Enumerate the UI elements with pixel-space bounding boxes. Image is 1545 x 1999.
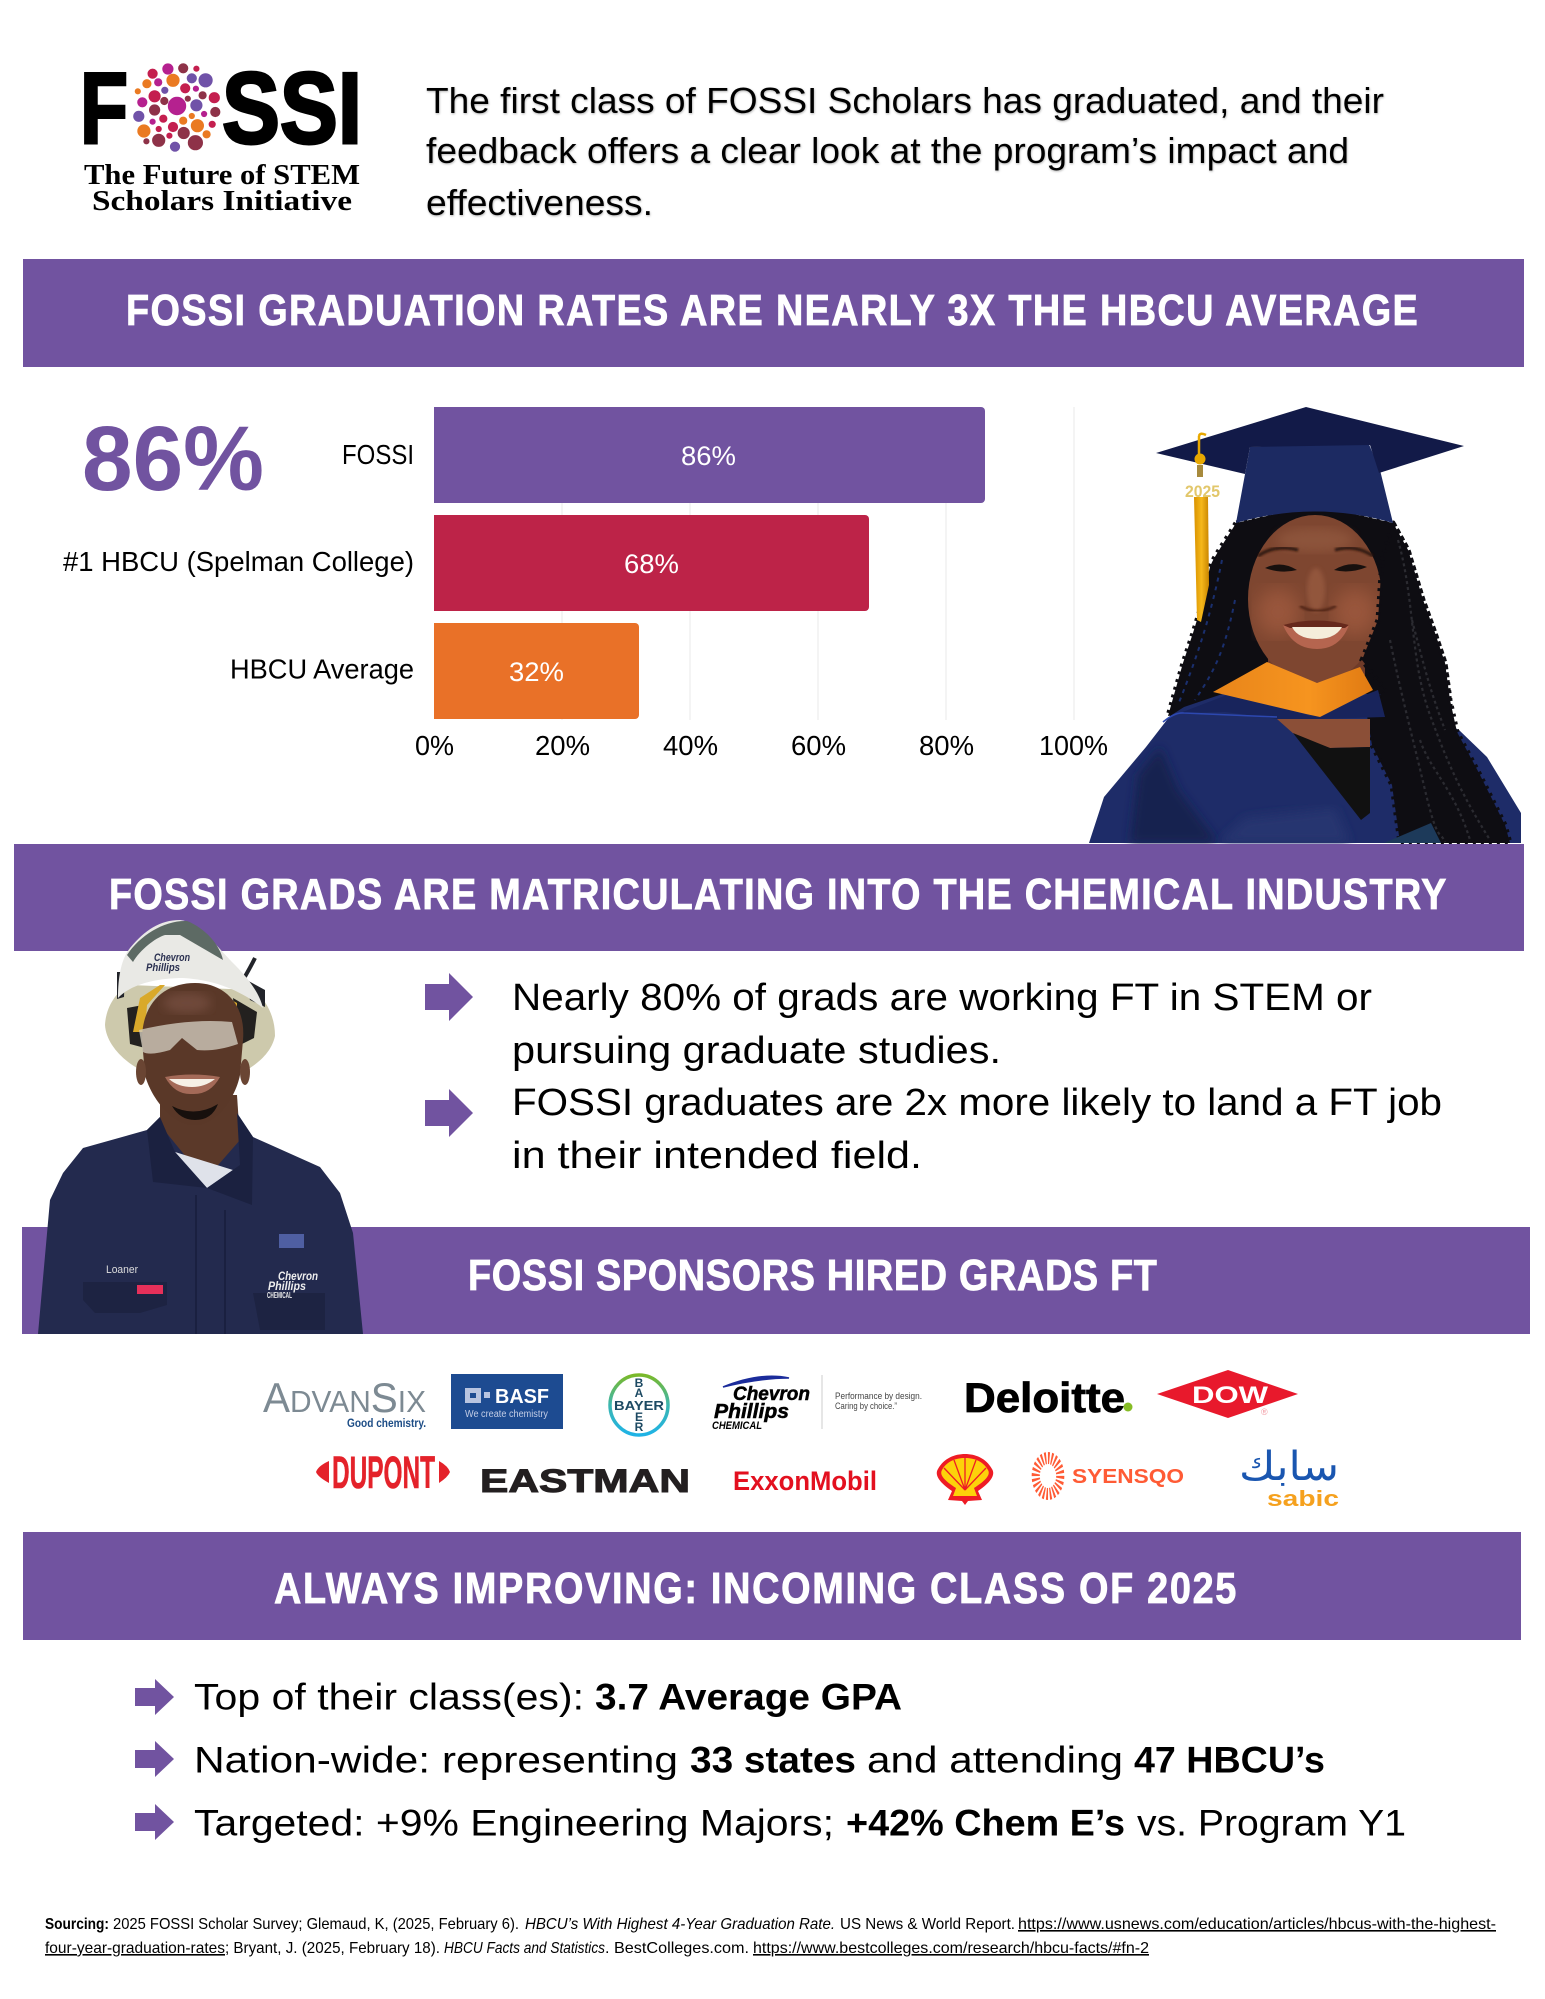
bar: FOSSI 86%: FOSSI bbox=[342, 439, 414, 470]
bar: #1 HBCU 68% bbox=[63, 515, 869, 611]
logo: Deloitte: Deloitte bbox=[964, 1374, 1125, 1421]
logo: FOSSI bbox=[80, 53, 362, 217]
banner: sponsors heading: FOSSI SPONSORS HIRED GRADS FT bbox=[468, 1250, 1157, 1300]
bullet: targeted bbox=[135, 1802, 1406, 1844]
bar: HBCU Average 32%: HBCU Average bbox=[230, 654, 414, 684]
banner: matriculating heading bbox=[14, 844, 1524, 951]
x axis labels: 100% bbox=[1039, 730, 1108, 761]
bullet: 2x more likely bbox=[425, 1082, 1442, 1177]
photo: engineer: Chevron bbox=[278, 1269, 318, 1283]
photo: engineer: CHEMICAL bbox=[267, 1291, 292, 1300]
pockets and badges bbox=[83, 1282, 167, 1313]
hair behind bbox=[1168, 505, 1450, 716]
cap crown bbox=[1236, 442, 1393, 523]
photo: engineer bbox=[38, 920, 363, 1334]
photo: engineer: Phillips bbox=[268, 1279, 306, 1293]
photo: engineer: Loaner bbox=[106, 1264, 138, 1276]
bullet: targeted: vs. Program Y1 bbox=[1137, 1802, 1406, 1844]
photo: graduate bbox=[1089, 407, 1521, 843]
logo: Bayer: E bbox=[635, 1410, 643, 1424]
bullet: nation-wide: and attending bbox=[867, 1740, 1123, 1780]
goggles bbox=[127, 921, 223, 962]
bullet: GPA bbox=[135, 1676, 902, 1718]
logo: Chevron Phillips: Performance by design. bbox=[835, 1391, 922, 1401]
logo: Dow: DOW bbox=[1192, 1382, 1268, 1409]
logo: Bayer: BAYER bbox=[614, 1398, 665, 1413]
sourcing footnote: https://www.usnews.com/education/articles/hbcus-with-the-highest- bbox=[1018, 1916, 1496, 1933]
bullet: nation-wide: 47 HBCU’s bbox=[1134, 1740, 1325, 1780]
banner: incoming class heading bbox=[23, 1532, 1521, 1640]
bar chart: graduation rates bbox=[63, 407, 1108, 761]
tassel bbox=[1185, 434, 1220, 622]
hat logo: Chevron bbox=[154, 952, 190, 964]
neck bbox=[1268, 650, 1365, 695]
logo: Chevron Phillips bbox=[712, 1375, 922, 1432]
x axis labels: 0% bbox=[415, 730, 454, 761]
logo: DuPont: DUPONT bbox=[332, 1447, 435, 1498]
logo dot cluster bbox=[134, 64, 220, 151]
bar: HBCU Average 32%: 32% bbox=[509, 657, 564, 687]
chest and shirt bbox=[1277, 719, 1370, 748]
bullet: targeted: +42% Chem E’s bbox=[846, 1802, 1125, 1844]
face bbox=[1248, 515, 1382, 683]
logo: Bayer: B bbox=[635, 1376, 644, 1390]
intro text: The first class of FOSSI Scholars has graduated, and their bbox=[426, 80, 1384, 121]
logo tagline bbox=[84, 159, 360, 217]
x axis labels: 40% bbox=[663, 730, 718, 761]
tassel: 2025 bbox=[1185, 482, 1220, 501]
sourcing footnote: HBCU Facts and Statistics bbox=[444, 1940, 605, 1957]
logo: Bayer: A bbox=[635, 1386, 644, 1400]
sourcing footnote: ; Bryant, J. (2025, February 18). bbox=[225, 1940, 440, 1957]
bullet: 2x more likely: FOSSI graduates are 2x more likely to land a FT job bbox=[512, 1082, 1442, 1124]
logo: BASF: BASF bbox=[495, 1386, 549, 1408]
logo: AdvanSix: Good chemistry. bbox=[347, 1416, 426, 1430]
logo tagline: Scholars Initiative bbox=[92, 185, 352, 217]
intro text: feedback offers a clear look at the program’s impact and bbox=[426, 130, 1349, 171]
bullet: targeted: Targeted: +9% Engineering Majors; bbox=[194, 1802, 834, 1844]
logo: Chevron Phillips: Chevron bbox=[733, 1384, 810, 1405]
bar: #1 HBCU 68%: #1 HBCU (Spelman College) bbox=[63, 546, 414, 577]
x axis labels: 80% bbox=[919, 730, 974, 761]
logo: AdvanSix: ADVANSIX bbox=[263, 1374, 426, 1421]
photo: engineer: Phillips bbox=[146, 962, 180, 974]
bullet: nation-wide: Nation-wide: representing bbox=[194, 1740, 678, 1780]
intro text bbox=[426, 80, 1384, 223]
placket bbox=[196, 1195, 225, 1334]
logo: Sabic bbox=[1239, 1444, 1339, 1511]
bullet: GPA: 3.7 Average GPA bbox=[595, 1676, 902, 1718]
sourcing footnote: US News & World Report. bbox=[840, 1916, 1015, 1933]
coverall bbox=[38, 1113, 363, 1334]
bullet: nation-wide bbox=[135, 1740, 1325, 1780]
logo: Dow: ® bbox=[1261, 1407, 1268, 1417]
sourcing footnote bbox=[45, 1916, 1496, 1957]
hair front right bbox=[1362, 523, 1510, 843]
bullet: 2x more likely: in their intended field. bbox=[512, 1135, 922, 1177]
logo wordmark bbox=[80, 53, 362, 165]
intro text: effectiveness. bbox=[426, 182, 653, 223]
logo tagline: The Future of STEM bbox=[84, 159, 360, 191]
logo: Chevron Phillips: Phillips bbox=[714, 1401, 789, 1423]
logo: BASF bbox=[451, 1374, 563, 1429]
banner: graduation rates heading: FOSSI GRADUATION RATES ARE NEARLY 3X THE HBCU AVERAGE bbox=[126, 285, 1418, 335]
logo: Bayer bbox=[610, 1375, 668, 1435]
bar: FOSSI 86%: 86% bbox=[681, 441, 736, 471]
x axis labels bbox=[415, 730, 1108, 761]
sourcing footnote: 2025 FOSSI Scholar Survey; Glemaud, K, (2025, February 6). bbox=[113, 1916, 519, 1933]
logo: ExxonMobil: ExxonMobil bbox=[733, 1466, 877, 1496]
hard hat brim bbox=[105, 985, 275, 1068]
logo: Syensqo bbox=[1036, 1458, 1184, 1494]
sponsor logos bbox=[263, 1370, 1339, 1511]
logo: Chevron Phillips: CHEMICAL bbox=[712, 1420, 762, 1432]
neck bbox=[160, 1095, 240, 1180]
sourcing footnote: https://www.bestcolleges.com/research/hbcu-facts/#fn-2 bbox=[753, 1940, 1149, 1957]
x axis labels: 60% bbox=[791, 730, 846, 761]
logo: DuPont bbox=[316, 1447, 450, 1498]
banner: graduation rates heading bbox=[23, 259, 1524, 367]
logo: Shell bbox=[937, 1454, 993, 1505]
hard hat dome bbox=[118, 920, 263, 1008]
orange hood bbox=[1163, 662, 1385, 722]
banner: sponsors heading bbox=[22, 1227, 1530, 1334]
logo wordmark: SSI bbox=[222, 53, 362, 165]
big stat: 86%: 86% bbox=[82, 408, 264, 510]
logo: Syensqo: SYENSQO bbox=[1072, 1466, 1184, 1488]
bullet: 80% working in STEM bbox=[425, 973, 1372, 1072]
yellow liner bbox=[133, 985, 237, 1032]
hat suspension bbox=[127, 998, 257, 1048]
logo wordmark: F bbox=[80, 53, 128, 165]
gown bbox=[1089, 688, 1521, 843]
logo: BASF: We create chemistry bbox=[465, 1409, 548, 1420]
bar: HBCU Average 32% bbox=[230, 623, 639, 719]
sourcing footnote: . BestColleges.com. bbox=[605, 1940, 749, 1957]
bar: FOSSI 86% bbox=[342, 407, 985, 503]
logo: Eastman: EASTMAN bbox=[480, 1463, 690, 1499]
logo: Chevron Phillips: Caring by choice.” bbox=[835, 1401, 897, 1411]
bullet: GPA: Top of their class(es): bbox=[194, 1676, 584, 1718]
banner: matriculating heading: FOSSI GRADS ARE MATRICULATING INTO THE CHEMICAL INDUSTRY bbox=[109, 869, 1446, 919]
mortarboard bbox=[1156, 407, 1464, 474]
face bbox=[136, 983, 250, 1125]
logo: Bayer: R bbox=[635, 1420, 644, 1434]
bar: #1 HBCU 68%: 68% bbox=[624, 549, 679, 579]
bullet: 80% working in STEM: Nearly 80% of grads are working FT in STEM or bbox=[512, 977, 1372, 1019]
bullet: nation-wide: 33 states bbox=[690, 1740, 856, 1780]
sourcing footnote: Sourcing: bbox=[45, 1916, 109, 1933]
logo: Dow bbox=[1157, 1370, 1298, 1418]
banner: incoming class heading: ALWAYS IMPROVING: INCOMING CLASS OF 2025 bbox=[274, 1563, 1236, 1613]
sourcing footnote: HBCU’s With Highest 4-Year Graduation Rate. bbox=[525, 1916, 835, 1933]
logo: Sabic: سابك bbox=[1239, 1444, 1339, 1490]
hat straps bbox=[117, 972, 265, 1007]
bullet: 80% working in STEM: pursuing graduate studies. bbox=[512, 1030, 1001, 1072]
logo: Sabic: sabic bbox=[1267, 1486, 1339, 1511]
collar bbox=[147, 1117, 207, 1188]
white tee bbox=[175, 1152, 233, 1188]
safety glasses bbox=[139, 1021, 238, 1054]
sourcing footnote: four-year-graduation-rates bbox=[45, 1940, 225, 1957]
x axis labels: 20% bbox=[535, 730, 590, 761]
